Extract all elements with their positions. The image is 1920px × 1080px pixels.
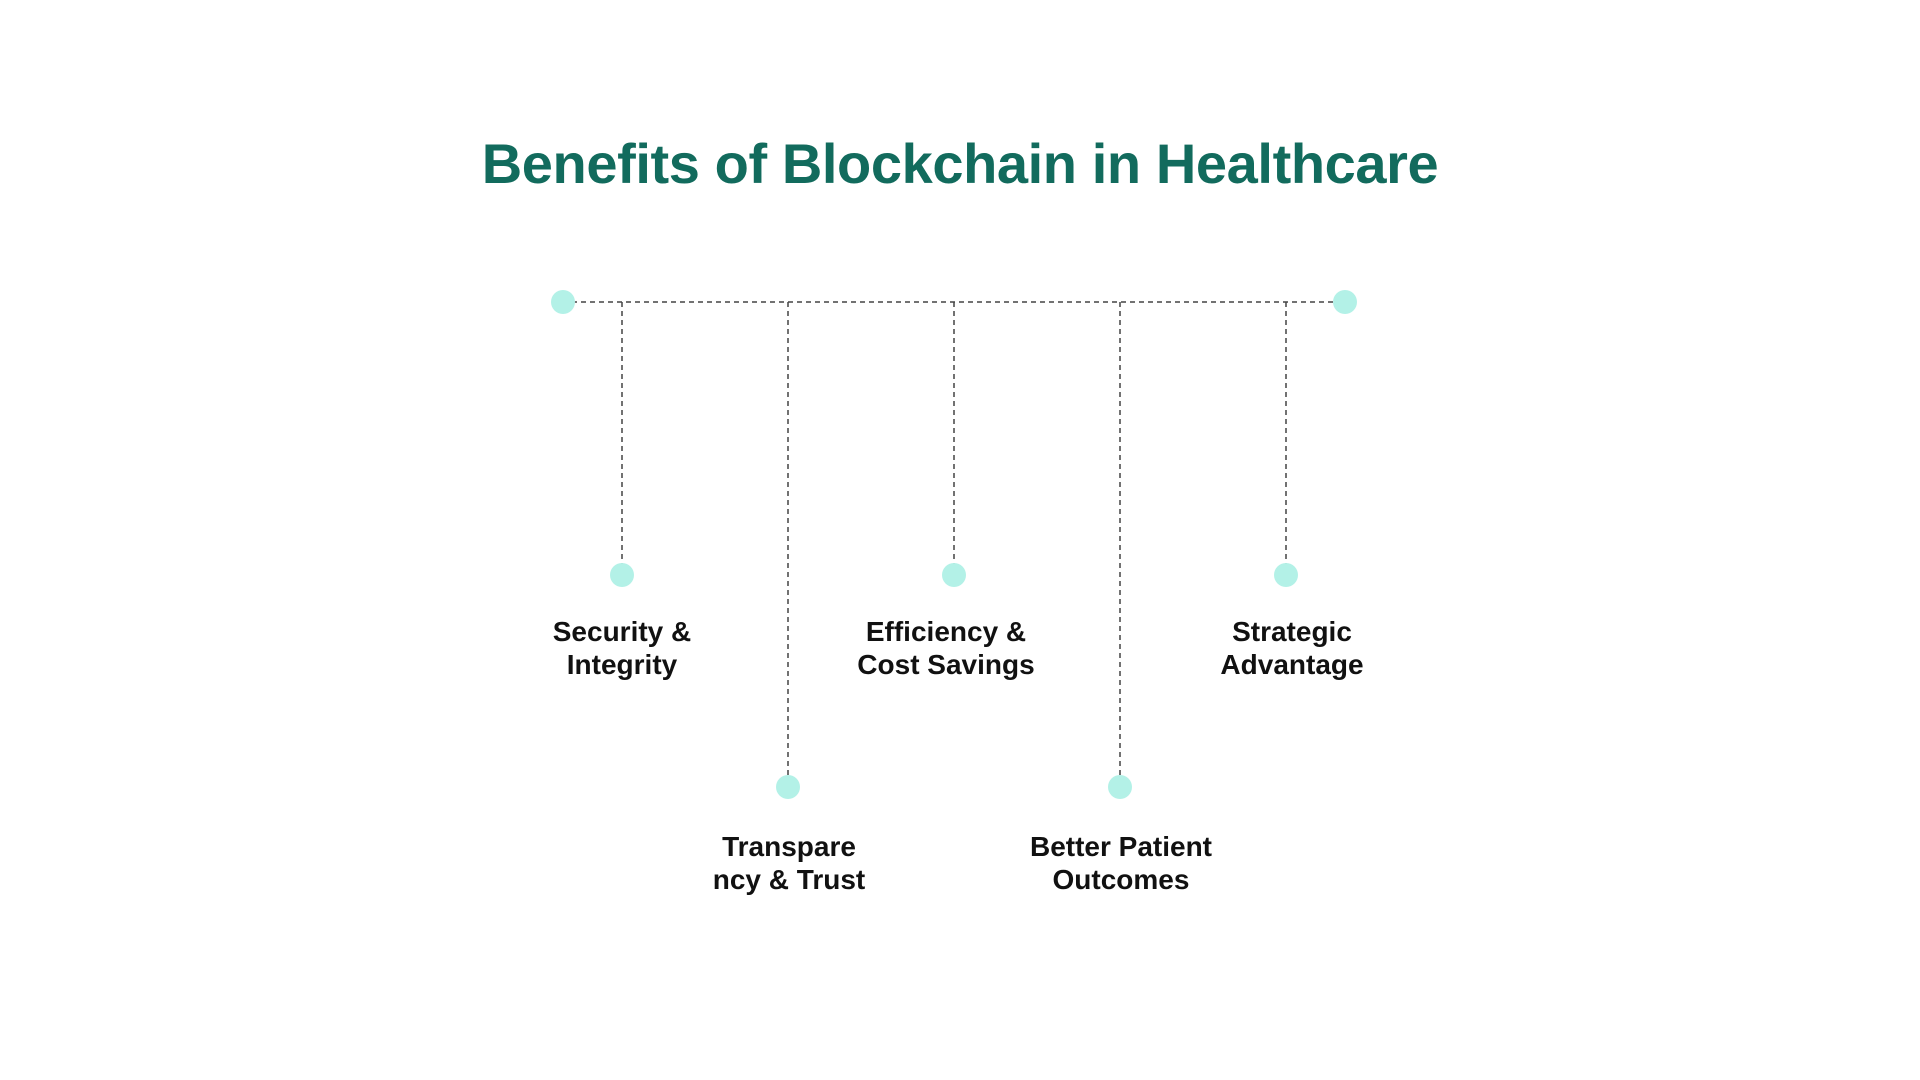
- label: Security & Integrity: Security &: [553, 616, 691, 647]
- label: Better Patient Outcomes: Outcomes: [1053, 864, 1189, 895]
- label: Transparency & Trust: Transpare: [722, 831, 856, 862]
- label: Security & Integrity: Integrity: [567, 649, 677, 680]
- label: Better Patient Outcomes: [1030, 831, 1212, 895]
- label: Strategic Advantage: Advantage: [1220, 649, 1364, 680]
- label: Security & Integrity: [553, 616, 691, 680]
- label: Transparency & Trust: [713, 831, 865, 895]
- vertical dashed connectors: [622, 302, 1286, 787]
- label: Strategic Advantage: [1220, 616, 1364, 680]
- label: Transparency & Trust: ncy & Trust: [713, 864, 865, 895]
- label: Better Patient Outcomes: Better Patient: [1030, 831, 1212, 862]
- label: Efficiency & Cost Savings: Cost Savings: [857, 649, 1035, 680]
- title: Benefits of Blockchain in Healthcare: [482, 132, 1438, 195]
- label: Efficiency & Cost Savings: [857, 616, 1035, 680]
- horizontal dashed connector: [563, 301, 1345, 303]
- label: Efficiency & Cost Savings: Efficiency &: [866, 616, 1026, 647]
- label: Strategic Advantage: Strategic: [1232, 616, 1352, 647]
- dots: [551, 290, 1357, 799]
